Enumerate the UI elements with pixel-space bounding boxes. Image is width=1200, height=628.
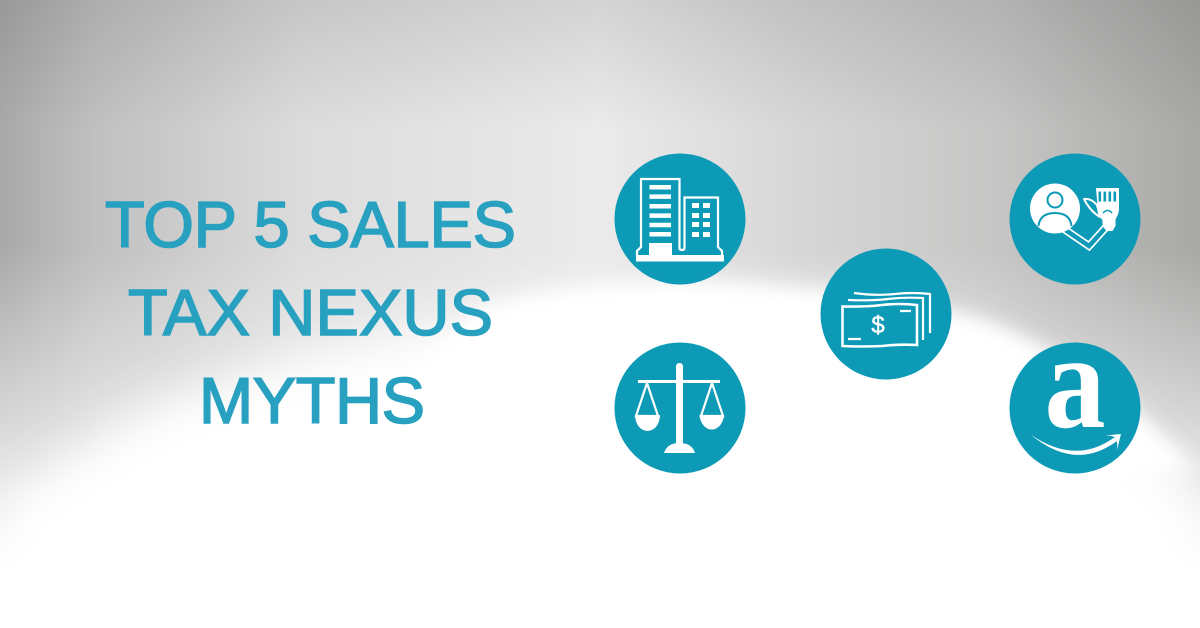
title: MYTHS	[199, 364, 425, 437]
icon: office buildings	[614, 154, 746, 284]
title: TOP 5 SALES	[105, 188, 516, 261]
icon: balance scales	[614, 342, 746, 474]
icon: person and robotic hand	[1010, 154, 1140, 284]
icon: banknotes	[820, 248, 952, 380]
title	[105, 188, 516, 437]
title: TAX NEXUS	[128, 276, 493, 349]
icon: banknotes: $	[871, 312, 885, 339]
icon: amazon logo	[1010, 306, 1140, 474]
icon: amazon logo: a	[1044, 306, 1106, 456]
